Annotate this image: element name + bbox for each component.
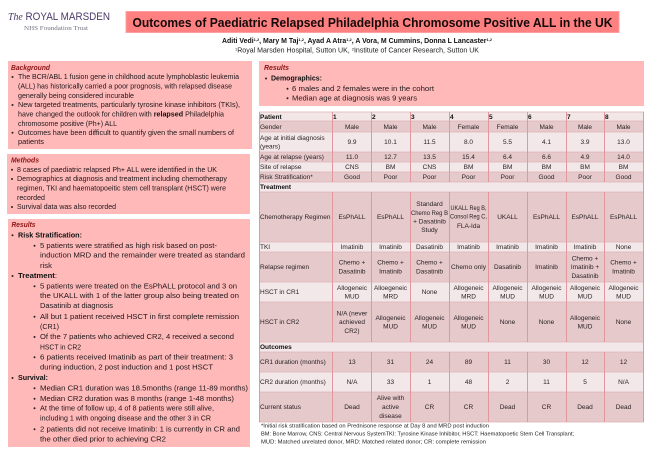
row: HSCT in CR1: MRD	[461, 294, 476, 300]
row: HSCT in CR2: MUD	[578, 324, 593, 330]
row: HSCT in CR2: MUD	[461, 324, 476, 330]
text block: demographics: Demographics:	[271, 74, 322, 83]
row: TKI: None	[616, 244, 632, 251]
row: chemotherapy regimen: EsPhALL	[377, 214, 404, 221]
row: CR1 duration: 13	[348, 359, 356, 366]
row: HSCT in CR1: MUD	[345, 294, 360, 300]
row: risk stratification: Good	[539, 174, 555, 181]
row: current status: CR	[542, 404, 551, 411]
text block: treatment: HSCT in CR2	[40, 342, 81, 352]
row: age at initial diagnosis: 13.0	[617, 139, 630, 146]
row: TKI: Imatinib	[496, 244, 519, 251]
title banner	[126, 12, 619, 32]
row: CR1 duration: 24	[426, 359, 433, 366]
row: age at initial diagnosis: 3.9	[580, 139, 590, 146]
row: age at relapse: 6.4	[503, 154, 512, 161]
text block: risk stratification: 5 patients were stratified as high risk based on post-	[40, 241, 218, 250]
panel: background	[8, 61, 252, 149]
text block: methods bullets: recorded	[17, 193, 45, 202]
row: patient: 6	[528, 114, 532, 121]
row: gender: Male	[578, 124, 592, 131]
row: CR1 duration: 12	[620, 359, 627, 366]
title banner: Outcomes of Paediatric Relapsed Philadelphia Chromosome Positive ALL in the UK	[132, 15, 613, 30]
row: gender: Male	[539, 124, 554, 131]
heading: methods: Methods	[11, 155, 39, 164]
row: relapse regimen: Imatinib	[535, 264, 558, 271]
row: HSCT in CR2: Allogeneic	[570, 315, 601, 322]
footnotes and abbreviations	[261, 424, 574, 445]
row: site of relapse: BM	[580, 164, 590, 171]
row: age at initial diagnosis: Age at initial diagnosis	[260, 135, 325, 142]
row: TKI: Imatinib	[379, 244, 402, 251]
row: gender: Male	[345, 124, 359, 131]
text block: treatment: Of the 7 patients who achieved CR2, 4 received a second	[40, 332, 234, 341]
row: relapse regimen: Chemo +	[339, 260, 365, 267]
text block: demographics: Median age at diagnosis was 9 years	[292, 94, 417, 102]
row: HSCT in CR2: Allogeneic	[454, 315, 484, 322]
row: current status: disease	[379, 413, 402, 420]
row: current status: Alive with	[377, 395, 405, 402]
row: TKI: TKI	[260, 244, 270, 251]
row: relapse regimen: Chemo only	[451, 264, 487, 271]
row: chemotherapy regimen: Standard	[416, 201, 443, 208]
text block: methods bullets: Survival data was also recorded	[17, 202, 116, 211]
row: age at initial diagnosis: (years)	[260, 144, 280, 151]
row: current status: Current status	[260, 404, 302, 411]
row: HSCT in CR1: Allogeneic	[570, 285, 601, 292]
table row bands	[259, 111, 644, 422]
row: HSCT in CR2: None	[500, 319, 516, 326]
row: age at initial diagnosis: 8.0	[464, 139, 473, 146]
row: CR2 duration: CR2 duration (months)	[260, 379, 326, 386]
authors: , Mary M Taj	[259, 38, 298, 45]
row: age at initial diagnosis: 10.1	[384, 139, 397, 146]
row: patient: 2	[372, 114, 376, 121]
footnotes and abbreviations: MUD: Matched unrelated donor, MRD: Matched related donor; CR: complete remission	[261, 439, 486, 445]
row: HSCT in CR2: None	[616, 319, 632, 326]
text block: background bullets: New targeted treatments, particularly tyrosine kinase inhibitors (TKIs),	[18, 100, 240, 109]
row: chemotherapy regimen	[260, 201, 637, 234]
row: patient: 1	[333, 114, 337, 121]
row: site of relapse: CNS	[345, 164, 360, 171]
row: site of relapse: BM	[503, 164, 512, 171]
row: HSCT in CR1: Allogeneic	[454, 285, 484, 292]
row: current status	[260, 395, 632, 420]
logo: The Royal Marsden NHS Foundation Trust: NHS Foundation Trust	[24, 25, 88, 32]
row: HSCT in CR1: HSCT in CR1	[260, 289, 300, 296]
row: relapse regimen: Chemo +	[377, 260, 404, 267]
row: patient	[260, 114, 609, 121]
row: HSCT in CR1: Allogeneic	[532, 285, 562, 292]
text block: survival: 2 patients did not receive Imatinib: 1 is currently in CR and	[40, 424, 240, 434]
text block: treatment: 5 patients were treated on the EsPhALL protocol and 3 on	[40, 282, 237, 290]
row: HSCT in CR2: achieved	[339, 319, 365, 326]
row: HSCT in CR1: Allogeneic	[608, 285, 639, 292]
row: HSCT in CR1: MUD	[539, 294, 554, 300]
row: age at relapse: 4.9	[580, 154, 590, 161]
row: site of relapse: BM	[386, 164, 395, 171]
row: current status: active	[382, 404, 399, 411]
row: relapse regimen: Chemo +	[610, 260, 637, 267]
row: CR2 duration: 33	[387, 379, 394, 386]
text block: treatment: (CR1)	[40, 322, 59, 331]
text block: methods bullets: regimen, TKI and haematopoeitic stem cell transplant (HSCT) were	[17, 184, 226, 192]
row: TKI	[260, 244, 632, 251]
text block: survival: including 1 with ongoing disease and the other 3 in CR	[40, 414, 211, 422]
row: age at initial diagnosis: 9.9	[347, 139, 357, 146]
row: relapse regimen: Relapse regimen	[260, 264, 310, 271]
row: chemotherapy regimen: Chemo Reg B	[411, 210, 448, 217]
heading: results: Results	[12, 220, 36, 229]
row: relapse regimen: Chemo +	[572, 255, 598, 262]
text block: background bullets: chromosome positive (Ph+) ALL	[18, 119, 117, 128]
affiliations: Institute of Cancer Research, Sutton UK	[354, 48, 479, 54]
row: HSCT in CR1: Alloegeneic	[374, 285, 408, 292]
logo: The Royal Marsden NHS Foundation Trust: The ROYAL MARSDEN	[8, 11, 110, 23]
text block: survival: Median CR2 duration was 8 months (range 1-48 months)	[40, 394, 234, 403]
row: chemotherapy regimen: EsPhALL	[571, 214, 599, 221]
authors: Aditi Vedi	[222, 38, 254, 45]
row: gender: Male	[422, 124, 437, 131]
text block: background bullets: The BCR/ABL 1 fusion gene in childhood acute lymphoblastic leukemia	[18, 72, 239, 81]
row: CR1 duration: 30	[543, 359, 550, 366]
text block: demographics	[265, 74, 434, 102]
row: HSCT in CR2: HSCT in CR2	[260, 319, 300, 326]
row: age at relapse: 6.6	[542, 154, 551, 161]
row: CR2 duration	[260, 379, 630, 386]
authors: , A Vora, M Cummins, Donna L Lancaster	[352, 38, 487, 45]
row: TKI: Imatinib	[457, 244, 480, 251]
row: chemotherapy regimen: EsPhALL	[610, 214, 637, 221]
row: chemotherapy regimen: Study	[421, 227, 439, 234]
row: site of relapse: BM	[619, 164, 628, 171]
row: patient: 5	[489, 114, 493, 121]
row: HSCT in CR1: None	[422, 289, 438, 296]
row: site of relapse: BM	[464, 164, 473, 171]
row: age at relapse: Age at relapse (years)	[260, 154, 324, 161]
row: CR1 duration: 12	[581, 359, 589, 366]
row: TKI: Imatinib	[574, 244, 597, 251]
authors: 1,2	[298, 37, 305, 42]
row: risk stratification: Good	[344, 174, 360, 181]
row: risk stratification: Poor	[501, 174, 515, 181]
row: chemotherapy regimen: FLA-Ida	[457, 223, 480, 230]
row: current status: Dead	[616, 404, 632, 411]
row: patient: 7	[567, 114, 571, 121]
row: HSCT in CR2: Allogeneic	[376, 315, 406, 322]
row: patient: 4	[450, 114, 454, 121]
row: HSCT in CR2: Allogeneic	[414, 315, 445, 322]
row: current status: Dead	[577, 404, 593, 411]
authors: 1,2	[346, 37, 353, 42]
row: chemotherapy regimen: + Dasatinib	[413, 219, 446, 226]
text block: background bullets: patients	[18, 137, 44, 146]
panel: results (left)	[8, 219, 250, 447]
row: TKI: Imatinib	[535, 244, 558, 251]
row: HSCT in CR1: MUD	[578, 294, 593, 300]
row: HSCT in CR1: Allogeneic	[337, 285, 368, 292]
affiliations: Royal Marsden Hospital, Sutton UK,	[237, 48, 352, 54]
row: age at initial diagnosis: 5.5	[503, 139, 512, 146]
row: current status: Dead	[344, 404, 360, 411]
row: HSCT in CR1: MRD	[383, 294, 398, 300]
row: current status: CR	[425, 404, 434, 411]
text block: demographics: 6 males and 2 females were in the cohort	[292, 84, 434, 93]
text block: survival: Median CR1 duration was 18.5months (range 11-89 months)	[40, 384, 248, 392]
row: relapse regimen: Dasatinib	[416, 268, 443, 276]
text block: treatment: Treatment :	[18, 271, 57, 280]
heading: background: Background	[11, 63, 50, 72]
row: CR1 duration	[260, 359, 627, 366]
row: risk stratification: Risk Stratification*	[260, 174, 313, 181]
text block: survival	[12, 373, 248, 444]
text block: treatment	[12, 271, 239, 372]
row: gender: Male	[616, 124, 631, 131]
row: chemotherapy regimen: Consol Reg C,	[450, 214, 487, 221]
text block: risk stratification: risk	[40, 261, 52, 270]
text block: treatment: All but 1 patient received HSCT in first complete remission	[40, 312, 239, 321]
text block: risk stratification: induction MRD and the remainder were treated as standard	[40, 250, 245, 260]
row: HSCT in CR2: MUD	[422, 324, 437, 330]
row: age at initial diagnosis	[260, 135, 630, 151]
affiliations: 1	[235, 46, 238, 52]
row: site of relapse: Site of relapse	[260, 164, 302, 171]
row: patient: 3	[411, 114, 415, 121]
row: risk stratification: Poor	[462, 174, 476, 181]
text block: background bullets: have changed the outlook for children with relapsed Philadelphia	[18, 110, 224, 118]
panel: methods	[7, 154, 250, 214]
row: relapse regimen	[260, 255, 637, 280]
row: relapse regimen: Dasatinib	[571, 273, 599, 280]
row: risk stratification: Poor	[423, 174, 437, 181]
row: current status: Dead	[500, 404, 516, 411]
row: CR1 duration: 11	[504, 359, 511, 366]
row: chemotherapy regimen: EsPhALL	[338, 214, 366, 221]
panel: results demographics	[259, 61, 644, 106]
text block: background bullets: generally being considered incurable	[18, 91, 134, 100]
row: site of relapse: BM	[542, 164, 551, 171]
row: chemotherapy regimen: Chemotherapy Regimen	[260, 214, 331, 221]
text block: treatment: Dasatinib at diagnosis	[40, 301, 113, 310]
row: age at relapse: 15.4	[462, 154, 475, 161]
row: CR1 duration: 89	[465, 359, 472, 366]
row: gender: Gender	[260, 124, 283, 131]
row: HSCT in CR2: N/A (never	[337, 310, 368, 317]
row: relapse regimen: Chemo +	[416, 260, 443, 267]
row: age at relapse	[260, 154, 630, 161]
row: current status: CR	[464, 404, 473, 411]
authors: , Ayad A Atra	[304, 38, 346, 45]
row: CR2 duration: 11	[543, 379, 550, 386]
text block: treatment: during induction, 2 post induction and 1 post HSCT	[40, 362, 214, 372]
row: gender: Female	[458, 124, 480, 131]
row: CR2 duration: 48	[465, 379, 472, 386]
row: age at initial diagnosis: 11.5	[423, 139, 436, 146]
section header: treatment: Treatment	[260, 184, 292, 191]
heading: results demographics: Results	[264, 63, 289, 72]
section header: outcomes: Outcomes	[260, 344, 292, 351]
row: risk stratification	[260, 174, 632, 181]
row: chemotherapy regimen: UKALL	[497, 214, 518, 221]
row: relapse regimen: Imatinib	[612, 268, 635, 276]
row: HSCT in CR2: MUD	[383, 324, 398, 330]
row: gender	[260, 124, 631, 131]
row: relapse regimen: Imatinib	[379, 268, 402, 276]
text block: methods bullets: Demographics at diagnosis and treatment including chemotherapy	[17, 174, 227, 183]
row: CR2 duration: 1	[428, 379, 432, 386]
text block: background bullets: (ALL) has historically carried a poor prognosis, with relapsed disease	[18, 82, 232, 90]
row: HSCT in CR1: Allogeneic	[492, 285, 523, 292]
row: TKI: Dasatinib	[416, 244, 443, 251]
text block: risk stratification	[12, 230, 245, 270]
text block: background bullets: Outcomes have been difficult to quantify given the small numbers of	[18, 128, 234, 137]
row: age at initial diagnosis: 4.1	[542, 139, 551, 146]
row: relapse regimen: Dasatinib	[338, 268, 366, 276]
row: CR2 duration: N/A	[347, 379, 358, 386]
authors: 1,2	[254, 37, 260, 42]
row: patient: 8	[605, 114, 609, 121]
row: CR1 duration: CR1 duration (months)	[260, 359, 326, 366]
row: HSCT in CR2	[260, 310, 632, 335]
row: chemotherapy regimen: UKALL Reg B,	[450, 205, 487, 212]
row: HSCT in CR1: MUD	[616, 294, 631, 300]
row: age at relapse: 11.0	[346, 154, 358, 161]
row: HSCT in CR2: CR2)	[344, 328, 360, 335]
row: TKI: Imatinib	[341, 244, 364, 251]
row: chemotherapy regimen: EsPhALL	[533, 214, 560, 221]
affiliations: 2	[352, 46, 355, 52]
text block: background bullets	[12, 72, 240, 146]
row: risk stratification: Poor	[384, 174, 398, 181]
text block: treatment: 6 patients received Imatinib as part of their treatment: 3	[40, 352, 233, 362]
row: relapse regimen: Imatinib +	[571, 264, 599, 271]
row: CR1 duration: 31	[387, 359, 394, 366]
text block: survival: At the time of follow up, 4 of 8 patients were still alive,	[40, 404, 214, 412]
text block: survival: the other died prior to achieving CR2	[40, 434, 166, 444]
row: CR2 duration: N/A	[618, 379, 630, 386]
row: HSCT in CR1: MUD	[500, 294, 515, 300]
patient outcomes table	[259, 111, 644, 422]
row: age at relapse: 12.7	[384, 154, 397, 161]
row: age at relapse: 13.5	[423, 154, 436, 161]
footnotes and abbreviations: BM: Bone Marrow, CNS: Central Nervous SystemTKI: Tyrosine Kinase Inhibitor, HSCT: Haematopoetic Stem Cell Transplant;	[261, 432, 574, 438]
row: age at relapse: 14.0	[617, 154, 630, 161]
text block: survival: Survival:	[18, 373, 48, 382]
authors: 1,2	[486, 37, 493, 42]
text block: risk stratification: Risk Stratification:	[18, 230, 82, 240]
row: site of relapse	[260, 164, 628, 171]
text block: methods bullets	[11, 165, 227, 211]
row: patient: Patient	[260, 114, 283, 121]
row: risk stratification: Poor	[578, 174, 593, 181]
row: CR2 duration: 5	[583, 379, 587, 386]
logo: The Royal Marsden NHS Foundation Trust	[8, 11, 110, 32]
row: HSCT in CR1	[260, 285, 639, 300]
row: gender: Female	[497, 124, 519, 131]
row: risk stratification: Good	[616, 174, 632, 181]
text block: methods bullets: 8 cases of paediatric relapsed Ph+ ALL were identified in the UK	[17, 165, 217, 174]
row: gender: Male	[383, 124, 398, 131]
text block: treatment: the UKALL with 1 of the latter group also being treated on	[40, 291, 239, 300]
footnotes and abbreviations: *Initial risk stratification based on Prednisone response at Day 8 and MRD post induction	[261, 424, 489, 430]
row: HSCT in CR2: None	[539, 319, 555, 326]
row: CR2 duration: 2	[506, 379, 510, 386]
row: relapse regimen: Dasatinib	[494, 264, 521, 271]
row: site of relapse: CNS	[423, 164, 437, 171]
